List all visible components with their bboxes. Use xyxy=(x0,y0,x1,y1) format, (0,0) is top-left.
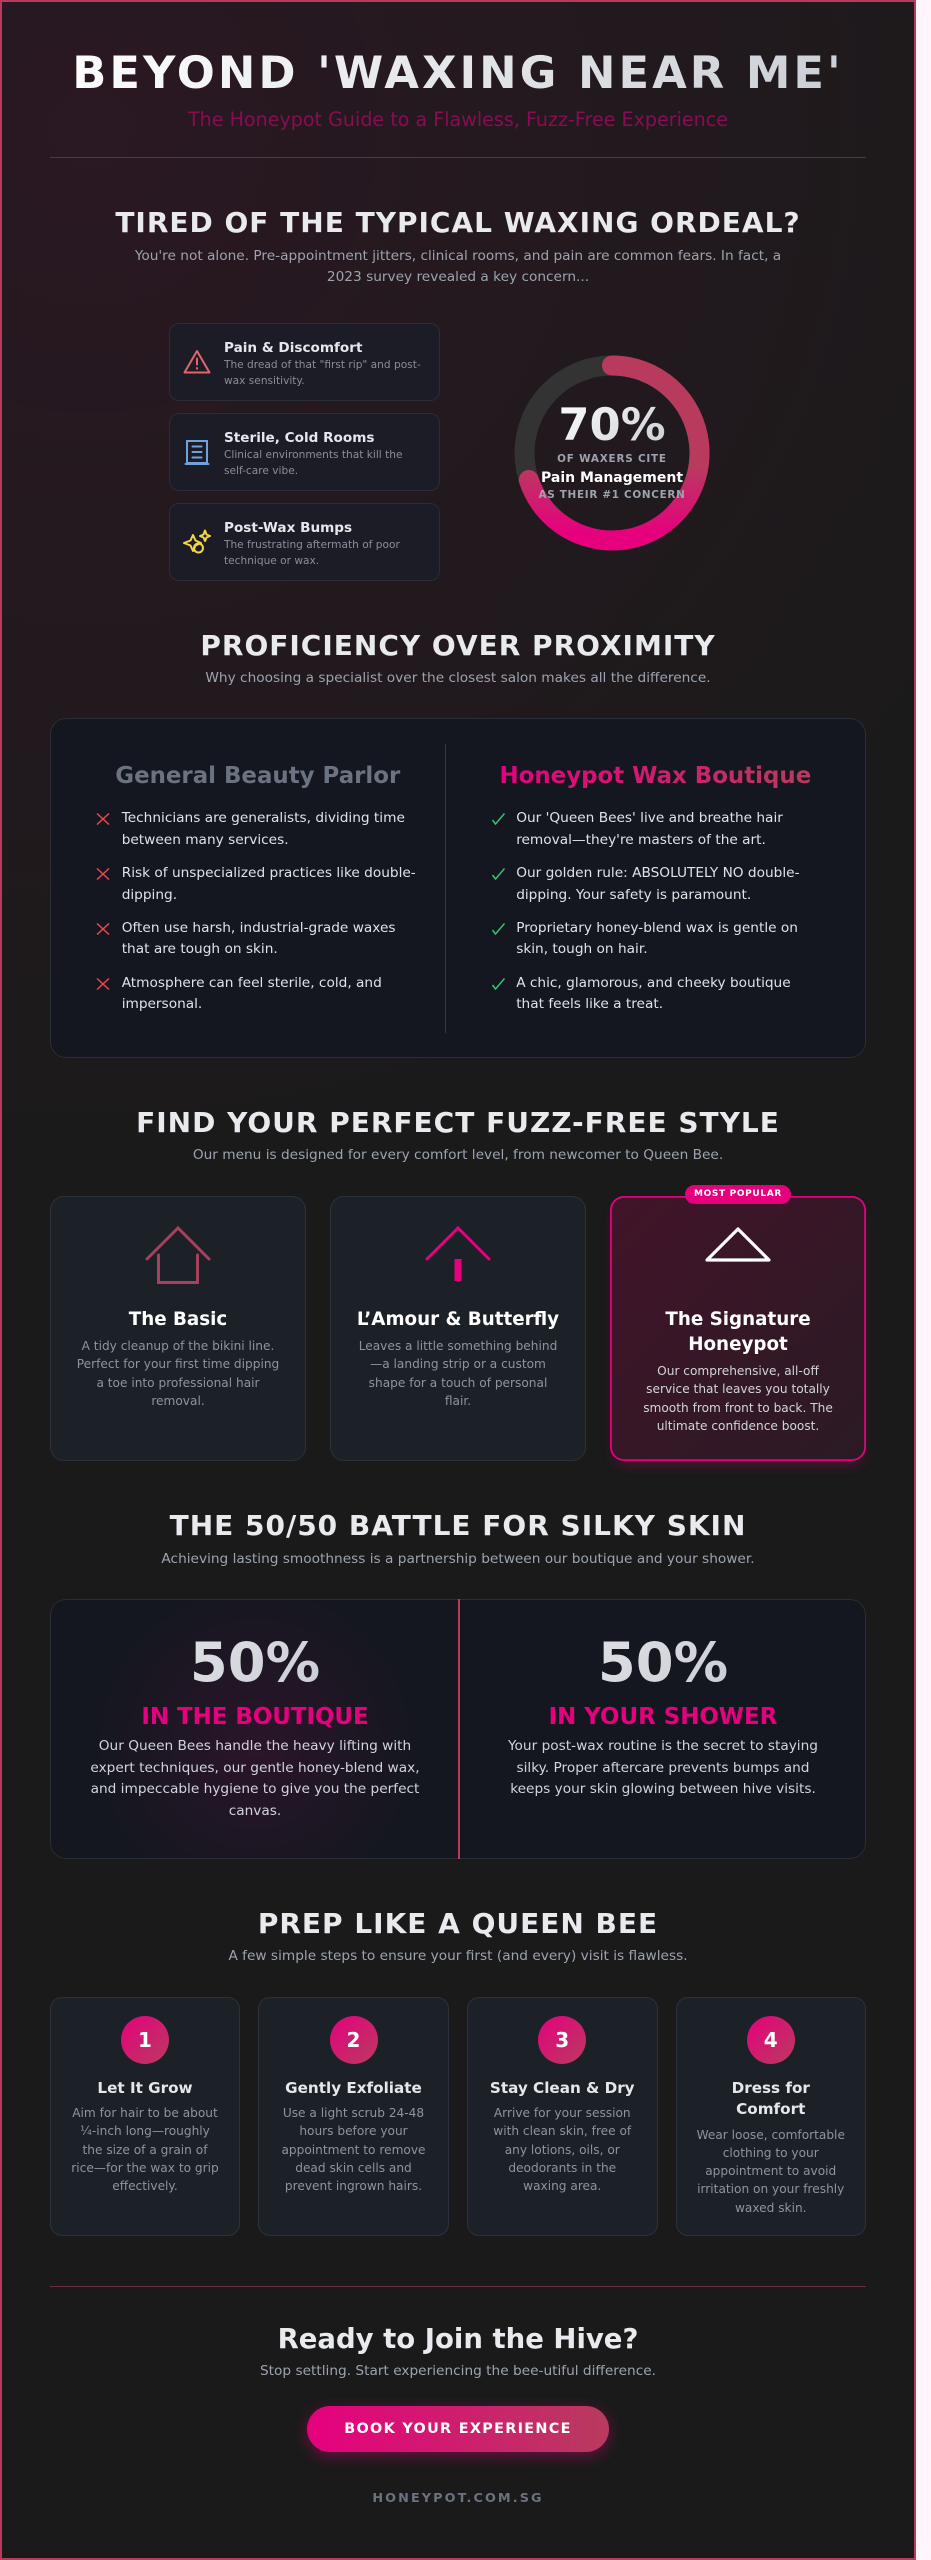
card text: removal. xyxy=(151,1394,205,1408)
icon: roof with strip xyxy=(423,1222,493,1288)
step text xyxy=(50,2104,240,2195)
icon: house outline xyxy=(145,1226,210,1284)
item xyxy=(96,810,405,848)
text: Risk of unspecialized practices like double- xyxy=(122,865,416,881)
step text: effectively. xyxy=(112,2179,178,2193)
text: Our 'Queen Bees' live and breathe hair xyxy=(516,810,783,826)
card text: Leaves a little something behind xyxy=(359,1339,557,1353)
step text: irritation on your freshly xyxy=(697,2182,844,2196)
description: self-care vibe. xyxy=(224,465,298,477)
card text xyxy=(50,1337,306,1410)
card title xyxy=(610,1307,866,1357)
step title xyxy=(676,2078,866,2120)
icon: triangle xyxy=(703,1222,773,1288)
label: Post-Wax Bumps xyxy=(224,520,352,536)
card text xyxy=(330,1337,586,1410)
step text: with clean skin, free of xyxy=(493,2124,631,2138)
description: The frustrating aftermath of poor xyxy=(224,539,400,551)
section: 50/50 heading xyxy=(50,1509,866,1571)
card text: shape for a touch of personal xyxy=(369,1376,547,1390)
card text xyxy=(610,1362,866,1435)
subheading: Our menu is designed for every comfort level, from newcomer to Queen Bee. xyxy=(193,1147,723,1163)
number xyxy=(747,2016,795,2064)
text: between many services. xyxy=(122,832,289,848)
card title: L’Amour & Butterfly xyxy=(357,1309,559,1330)
step text: rice—for the wax to grip xyxy=(71,2161,219,2175)
step text: ¼-inch long—roughly xyxy=(80,2124,210,2138)
step text xyxy=(676,2126,866,2217)
panel: sterile rooms xyxy=(169,413,440,491)
step text: Wear loose, comfortable xyxy=(697,2128,845,2142)
card text: Our comprehensive, all-off xyxy=(657,1364,819,1378)
value: 70% xyxy=(558,398,666,451)
intro text: 2023 survey revealed a key concern... xyxy=(327,269,589,285)
label: Sterile, Cold Rooms xyxy=(224,430,374,446)
text: and impeccable hygiene to give you the perfect xyxy=(91,1781,419,1797)
card text: A tidy cleanup of the bikini line. xyxy=(82,1339,274,1353)
intro text: You're not alone. Pre-appointment jitters, clinical rooms, and pain are common fears. In fact, a xyxy=(135,248,781,264)
card: the basic xyxy=(50,1196,306,1461)
text: Proprietary honey-blend wax is gentle on xyxy=(516,920,798,936)
card title: The Signature xyxy=(665,1309,811,1330)
section: proficiency heading xyxy=(200,628,716,686)
percent: 50% xyxy=(598,1631,728,1694)
text xyxy=(122,974,382,1012)
icon: check xyxy=(492,868,505,880)
heading: TIRED OF THE TYPICAL WAXING ORDEAL? xyxy=(115,206,801,239)
icon: check xyxy=(492,978,505,990)
step text: Use a light scrub 24-48 xyxy=(283,2106,424,2120)
half: in your shower xyxy=(458,1599,866,1859)
text xyxy=(458,1736,868,1800)
caption line 3: AS THEIR #1 CONCERN xyxy=(539,488,685,500)
number xyxy=(330,2016,378,2064)
cta text: Stop settling. Start experiencing the bee-utiful difference. xyxy=(260,2362,656,2378)
icon: building xyxy=(184,440,210,465)
text: Often use harsh, industrial-grade waxes xyxy=(122,920,396,936)
text xyxy=(122,865,416,903)
number xyxy=(538,2016,586,2064)
subtitle: The Honeypot Guide to a Flawless, Fuzz-Free Experience xyxy=(188,108,728,131)
icon: cross xyxy=(96,868,110,880)
step text: prevent ingrown hairs. xyxy=(285,2179,422,2193)
description xyxy=(224,539,400,567)
icon: warning triangle xyxy=(184,350,210,374)
card title: Honeypot xyxy=(688,1334,788,1355)
text: impersonal. xyxy=(122,996,202,1012)
step title: Stay Clean & Dry xyxy=(490,2078,635,2096)
text xyxy=(516,974,791,1012)
item xyxy=(96,920,396,957)
badge xyxy=(685,1185,791,1204)
step text: clothing to your xyxy=(723,2146,819,2160)
step 3 xyxy=(467,1997,658,2236)
cta heading: Ready to Join the Hive? xyxy=(278,2323,638,2355)
section: style menu heading xyxy=(136,1106,780,1163)
panel: pain and discomfort xyxy=(169,323,440,401)
description xyxy=(224,359,421,387)
card text: flair. xyxy=(445,1394,471,1408)
step text: the size of a grain of xyxy=(82,2143,207,2157)
text: Your post-wax routine is the secret to staying xyxy=(508,1738,818,1754)
text: skin, tough on hair. xyxy=(516,941,648,957)
step text: dead skin cells and xyxy=(295,2161,412,2175)
item xyxy=(492,865,800,903)
column: general beauty parlor xyxy=(96,763,416,1012)
percent: 50% xyxy=(190,1631,320,1694)
text: canvas. xyxy=(229,1802,281,1818)
description: wax sensitivity. xyxy=(224,375,305,387)
card text: service that leaves you totally xyxy=(646,1382,830,1396)
description: technique or wax. xyxy=(224,555,319,567)
description: The dread of that "first rip" and post- xyxy=(224,359,421,371)
text: that are tough on skin. xyxy=(122,941,278,957)
text: dipping. xyxy=(122,887,177,903)
badge: MOST POPULAR xyxy=(694,1189,782,1199)
description: Clinical environments that kill the xyxy=(224,449,403,461)
step text: hours before your xyxy=(299,2124,408,2138)
icon: cross xyxy=(96,978,110,990)
step 2 xyxy=(258,1997,449,2236)
number: 4 xyxy=(764,2028,778,2052)
text: expert techniques, our gentle honey-blend wax, xyxy=(90,1760,420,1776)
column: honeypot wax boutique xyxy=(492,763,811,1012)
donut ring xyxy=(514,356,710,550)
text: that feels like a treat. xyxy=(516,996,663,1012)
number xyxy=(121,2016,169,2064)
step text: deodorants in the xyxy=(508,2161,616,2175)
card: the signature honeypot xyxy=(610,1196,866,1461)
text xyxy=(516,865,800,903)
icon: cross xyxy=(96,813,110,825)
subheading: A few simple steps to ensure your first (and every) visit is flawless. xyxy=(228,1948,688,1964)
panel: post-wax bumps xyxy=(169,503,440,581)
icon: check xyxy=(492,813,505,825)
caption line 2: Pain Management xyxy=(541,470,683,486)
title: BEYOND 'WAXING NEAR ME' xyxy=(72,46,844,99)
text: Technicians are generalists, dividing time xyxy=(122,810,405,826)
icon: cross xyxy=(96,923,110,935)
text xyxy=(50,1736,460,1822)
card text: —a landing strip or a custom xyxy=(370,1357,546,1371)
step text: appointment to avoid xyxy=(705,2164,836,2178)
button: BOOK YOUR EXPERIENCE xyxy=(344,2421,572,2437)
caption line 1: OF WAXERS CITE xyxy=(557,452,667,464)
card title: The Basic xyxy=(129,1309,227,1330)
column heading: Honeypot Wax Boutique xyxy=(500,763,811,789)
subheading: Why choosing a specialist over the closest salon makes all the difference. xyxy=(205,670,711,686)
section: the ordeal heading xyxy=(115,206,801,285)
icon: check xyxy=(492,923,505,935)
panel: 50/50 split xyxy=(50,1599,866,1859)
step text xyxy=(258,2104,449,2195)
step title: Dress for xyxy=(732,2078,810,2096)
step 4 xyxy=(676,1997,866,2236)
label: IN THE BOUTIQUE xyxy=(141,1704,369,1730)
heading: THE 50/50 BATTLE FOR SILKY SKIN xyxy=(170,1509,746,1542)
text xyxy=(516,810,783,848)
heading: FIND YOUR PERFECT FUZZ-FREE STYLE xyxy=(136,1106,780,1139)
website: HONEYPOT.COM.SG xyxy=(372,2491,544,2506)
text xyxy=(122,920,396,957)
text xyxy=(516,920,798,957)
description xyxy=(224,449,403,477)
step 1 xyxy=(50,1997,240,2236)
item xyxy=(96,865,416,903)
intro text xyxy=(135,248,781,285)
heading: PROFICIENCY OVER PROXIMITY xyxy=(200,628,716,662)
column heading: General Beauty Parlor xyxy=(115,763,400,789)
item xyxy=(492,810,783,848)
text: Our Queen Bees handle the heavy lifting with xyxy=(99,1738,411,1754)
step text xyxy=(467,2104,658,2195)
card text: smooth from front to back. The xyxy=(643,1401,833,1415)
heading: PREP LIKE A QUEEN BEE xyxy=(258,1906,658,1940)
text: Atmosphere can feel sterile, cold, and xyxy=(122,974,382,990)
step text: waxed skin. xyxy=(735,2201,807,2215)
step text: waxing area. xyxy=(523,2179,601,2193)
half: in the boutique xyxy=(50,1599,457,1859)
number: 1 xyxy=(138,2028,152,2052)
icon: sparkles xyxy=(183,530,211,554)
text: dipping. Your safety is paramount. xyxy=(516,887,751,903)
step text: any lotions, oils, or xyxy=(505,2143,620,2157)
step text: Aim for hair to be about xyxy=(72,2106,218,2120)
chart: 70 percent donut xyxy=(514,356,710,550)
number: 3 xyxy=(555,2028,569,2052)
card: l'amour and butterfly xyxy=(330,1196,586,1461)
text: keeps your skin glowing between hive visits. xyxy=(510,1781,816,1797)
label: IN YOUR SHOWER xyxy=(549,1704,777,1730)
percent xyxy=(50,1628,460,1698)
text: Our golden rule: ABSOLUTELY NO double- xyxy=(516,865,800,881)
split divider xyxy=(458,1599,460,1859)
step title: Gently Exfoliate xyxy=(285,2078,422,2096)
text: silky. Proper aftercare prevents bumps and xyxy=(516,1760,810,1776)
text: A chic, glamorous, and cheeky boutique xyxy=(516,974,791,990)
step text: Arrive for your session xyxy=(494,2106,631,2120)
text: removal—they're masters of the art. xyxy=(516,832,766,848)
percent xyxy=(458,1628,868,1698)
subheading: Achieving lasting smoothness is a partnership between our boutique and your shower. xyxy=(161,1550,755,1566)
card text: ultimate confidence boost. xyxy=(657,1419,819,1433)
item xyxy=(492,920,798,957)
item xyxy=(492,974,791,1012)
header xyxy=(72,46,844,131)
item xyxy=(96,974,382,1012)
button xyxy=(307,2406,609,2452)
card text: a toe into professional hair xyxy=(96,1376,260,1390)
panel: comparison xyxy=(50,718,866,1058)
step text: appointment to remove xyxy=(281,2143,426,2157)
section: prep heading xyxy=(50,1906,866,1968)
label: Pain & Discomfort xyxy=(224,340,362,356)
text xyxy=(122,810,405,848)
card text: Perfect for your first time dipping xyxy=(77,1357,279,1371)
step title: Comfort xyxy=(736,2100,805,2118)
call to action xyxy=(50,2320,866,2510)
step title: Let It Grow xyxy=(97,2078,193,2096)
number: 2 xyxy=(347,2028,360,2052)
